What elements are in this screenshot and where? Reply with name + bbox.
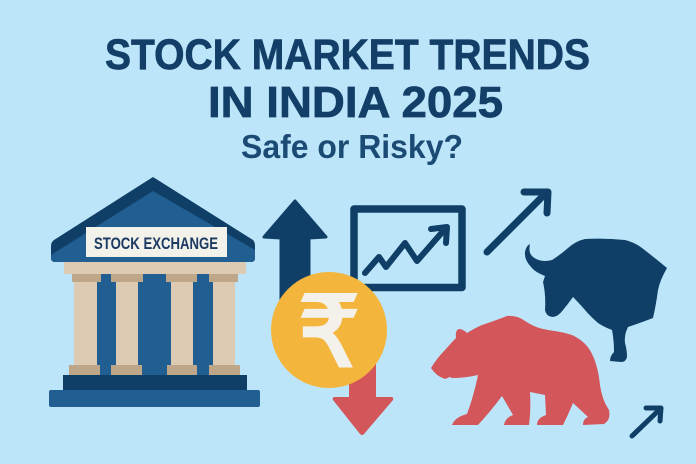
title: IN INDIA 2025 [208,78,503,127]
icon: chart frame with rising line [354,209,462,288]
icon: large up arrow [264,201,326,300]
steps [63,375,247,390]
entablature [64,262,246,274]
icon: down arrow [333,360,393,435]
building back wall [97,274,213,375]
icon: diagonal arrow top right [487,192,548,252]
roof [51,177,255,262]
title: STOCK MARKET TRENDS [105,31,590,79]
icon: small diagonal arrow [632,408,661,436]
rupee symbol: ₹ [298,277,360,387]
sign: STOCK EXCHANGE [94,234,218,253]
sign [86,227,227,257]
icon: bear silhouette [431,316,609,425]
icon: stock exchange building [49,177,260,407]
icon: rupee coin [271,272,387,388]
icon: bull silhouette [525,239,667,362]
columns [69,274,240,375]
subtitle: Safe or Risky? [241,128,463,165]
title [105,31,590,127]
